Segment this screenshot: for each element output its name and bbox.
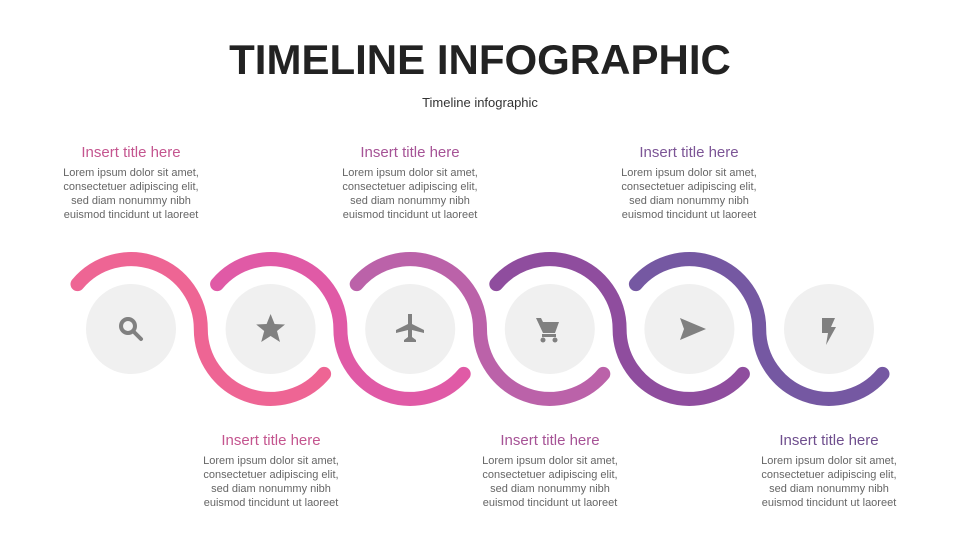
text block 6: euismod tincidunt ut laoreet — [762, 497, 896, 509]
text block 6: Lorem ipsum dolor sit amet, — [761, 455, 897, 467]
icon: send — [680, 318, 706, 340]
text block 6: consectetuer adipiscing elit, — [761, 469, 897, 481]
text block 5: euismod tincidunt ut laoreet — [622, 209, 756, 221]
text block 5 — [621, 144, 757, 221]
wave segment 4 — [496, 259, 743, 399]
text block 1: consectetuer adipiscing elit, — [63, 181, 199, 193]
text block 3: consectetuer adipiscing elit, — [342, 181, 478, 193]
title: TIMELINE INFOGRAPHIC — [229, 36, 731, 83]
text block 4: Lorem ipsum dolor sit amet, — [482, 455, 618, 467]
icon: plane — [396, 314, 424, 342]
icon: search — [121, 319, 141, 339]
wave segment 3 — [357, 259, 603, 399]
text block 1: Insert title here — [81, 144, 181, 161]
subtitle: Timeline infographic — [422, 95, 538, 110]
text block 2: Insert title here — [221, 432, 321, 449]
text block 1: sed diam nonummy nibh — [71, 195, 191, 207]
text block 3: Lorem ipsum dolor sit amet, — [342, 167, 478, 179]
text block 2: Lorem ipsum dolor sit amet, — [203, 455, 339, 467]
wave segment 2 — [217, 259, 464, 399]
icon: bolt — [822, 318, 836, 345]
text block 2: consectetuer adipiscing elit, — [203, 469, 339, 481]
text block 5: consectetuer adipiscing elit, — [621, 181, 757, 193]
wave segment 5 — [636, 259, 882, 399]
icon: star — [256, 314, 285, 342]
text block 2: euismod tincidunt ut laoreet — [204, 497, 338, 509]
text block 5: sed diam nonummy nibh — [629, 195, 749, 207]
text block 3: euismod tincidunt ut laoreet — [343, 209, 477, 221]
text block 5: Lorem ipsum dolor sit amet, — [621, 167, 757, 179]
text block 1: Lorem ipsum dolor sit amet, — [63, 167, 199, 179]
text block 5: Insert title here — [639, 144, 739, 161]
text block 3 — [342, 144, 478, 221]
text block 3: Insert title here — [360, 144, 460, 161]
text block 1 — [63, 144, 199, 221]
text block 6: sed diam nonummy nibh — [769, 483, 889, 495]
text block 4: consectetuer adipiscing elit, — [482, 469, 618, 481]
text block 2 — [203, 432, 339, 509]
text block 3: sed diam nonummy nibh — [350, 195, 470, 207]
wave segment 1 — [78, 259, 324, 399]
text block 4: sed diam nonummy nibh — [490, 483, 610, 495]
icon: cart — [536, 318, 559, 342]
text block 6 — [761, 432, 897, 509]
text block 2: sed diam nonummy nibh — [211, 483, 331, 495]
text block 6: Insert title here — [779, 432, 879, 449]
text block 1: euismod tincidunt ut laoreet — [64, 209, 198, 221]
text block 4 — [482, 432, 618, 509]
text block 4: Insert title here — [500, 432, 600, 449]
text block 4: euismod tincidunt ut laoreet — [483, 497, 617, 509]
